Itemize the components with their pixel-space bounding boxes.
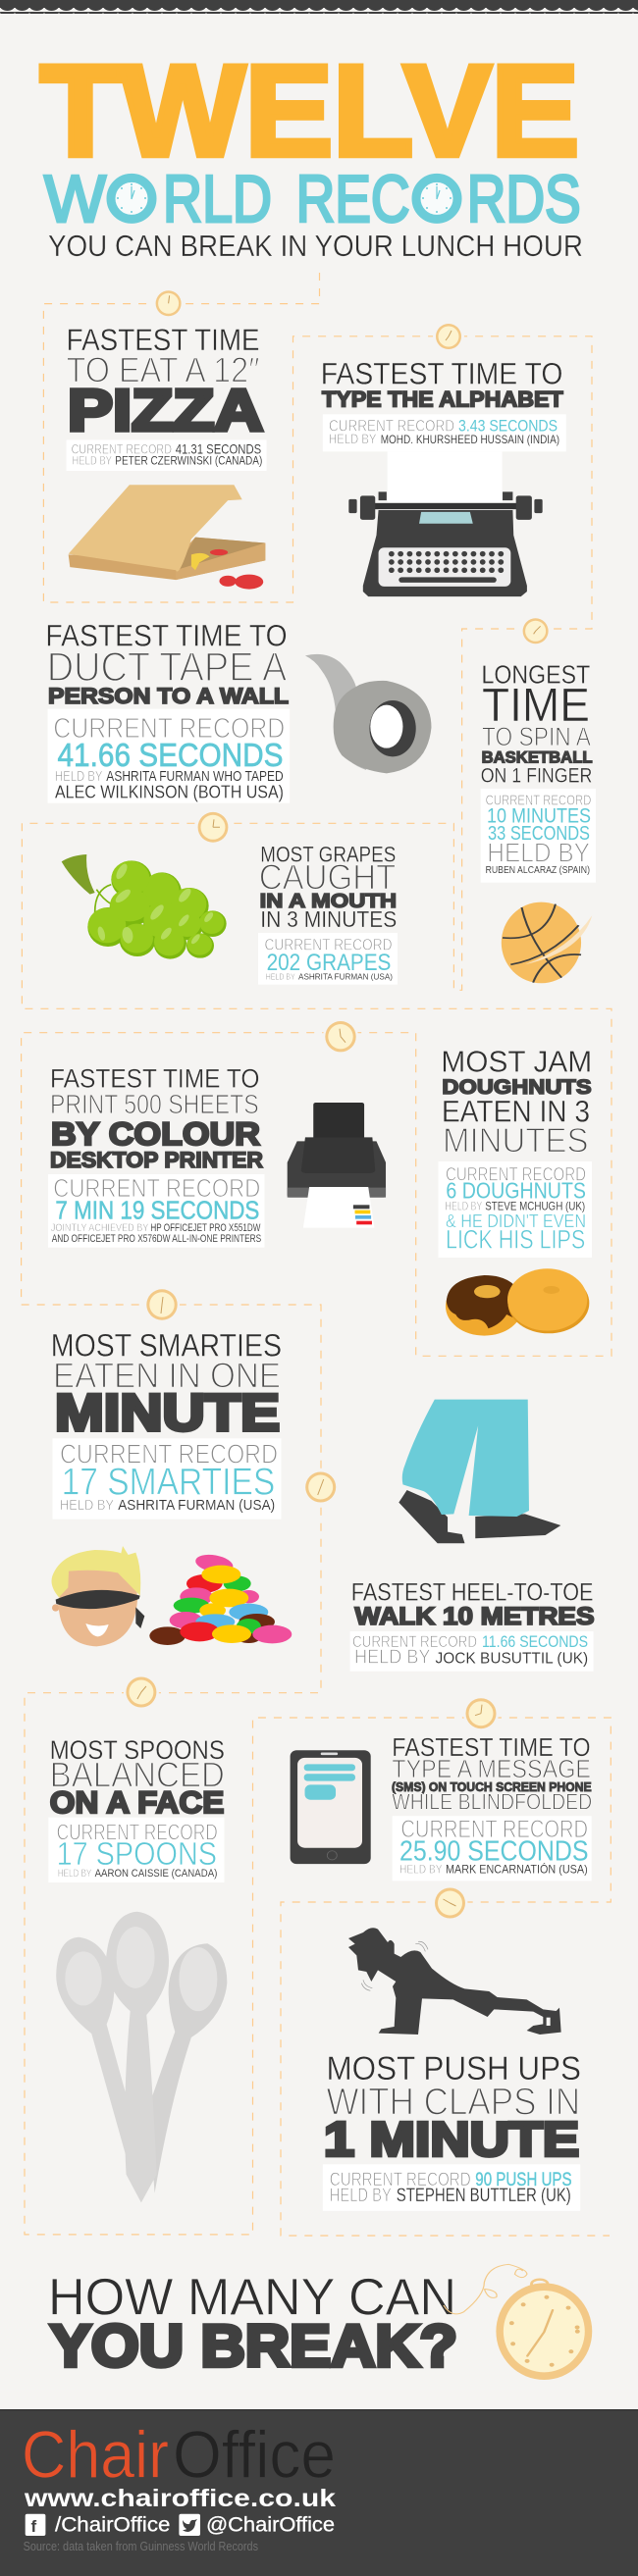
record box: basketball: RUBEN ALCARAZ (SPAIN) bbox=[486, 865, 590, 876]
record box: duct tape: 41.66 SECONDS bbox=[57, 738, 283, 774]
panel: jam doughnuts bbox=[438, 1044, 592, 1336]
source note: Source: data taken from Guinness World Records bbox=[24, 2540, 258, 2553]
record box: smarties: 17 SMARTIES bbox=[62, 1461, 275, 1503]
top scalloped border bbox=[0, 0, 638, 14]
record box: spoons: 17 SPOONS bbox=[57, 1836, 217, 1873]
panel: pizza bbox=[67, 322, 267, 590]
record box: jam doughnuts: 6 DOUGHNUTS bbox=[446, 1178, 586, 1204]
heading: pizza: FASTEST TIME bbox=[67, 322, 260, 357]
record box: pizza: 41.31 SECONDS bbox=[176, 441, 261, 457]
title line: WORLD RECORDS: RDS bbox=[467, 163, 581, 236]
icon: facebook: f bbox=[31, 2517, 37, 2536]
heading: grapes: IN A MOUTH bbox=[260, 891, 397, 912]
heading: pizza: TO EAT A 12″ bbox=[67, 349, 260, 390]
heading: push ups: MOST PUSH UPS bbox=[326, 2050, 581, 2087]
heading: jam doughnuts bbox=[441, 1044, 592, 1159]
heading: spoons: BALANCED bbox=[50, 1754, 225, 1794]
record box: typewriter: 3.43 SECONDS bbox=[458, 417, 558, 436]
clock marker: typewriter bbox=[433, 321, 464, 352]
record box: basketball bbox=[481, 789, 596, 883]
panel: spoons bbox=[48, 1735, 227, 2202]
heading: spoons: ON A FACE bbox=[50, 1784, 224, 1820]
record box: grapes: HELD BY bbox=[266, 971, 295, 981]
clock marker: message bbox=[463, 1696, 499, 1731]
icon: pizza box bbox=[69, 485, 265, 590]
heading: duct tape bbox=[45, 617, 289, 708]
heading: basketball bbox=[481, 662, 593, 787]
record box: jam doughnuts bbox=[438, 1161, 592, 1258]
panel: message bbox=[291, 1732, 592, 1880]
heading: spoons: MOST SPOONS bbox=[50, 1735, 225, 1765]
title line: WORLD RECORDS: REC bbox=[296, 163, 410, 236]
twitter handle: @ChairOffice bbox=[206, 2514, 335, 2537]
heading: how many can you break bbox=[48, 2268, 457, 2379]
title line: WORLD RECORDS bbox=[44, 163, 581, 236]
record box: printer bbox=[48, 1174, 265, 1248]
heading: pizza bbox=[67, 322, 263, 443]
record box: jam doughnuts: HELD BY bbox=[446, 1201, 482, 1213]
clock markers bbox=[124, 287, 552, 1921]
heading: message: WHILE BLINDFOLDED bbox=[392, 1789, 592, 1815]
record box: message: CURRENT RECORD bbox=[400, 1817, 588, 1843]
record box: jam doughnuts: LICK HIS LIPS bbox=[446, 1225, 585, 1255]
icon: push up figure bbox=[348, 1928, 561, 2035]
icon: basketball bbox=[502, 902, 592, 983]
title line: subtitle: YOU CAN BREAK IN YOUR LUNCH HOUR bbox=[48, 230, 583, 263]
record box: typewriter: MOHD. KHURSHEED HUSSAIN (INDIA) bbox=[381, 434, 559, 446]
heading: jam doughnuts: MINUTES bbox=[443, 1121, 589, 1159]
heading: duct tape: PERSON TO A WALL bbox=[48, 684, 289, 708]
record box: basketball: HELD BY bbox=[487, 837, 590, 867]
icon: twitter bbox=[179, 2514, 200, 2536]
record box: typewriter: CURRENT RECORD bbox=[329, 417, 454, 436]
record box: pizza: HELD BY bbox=[72, 456, 112, 468]
record box: push ups: HELD BY bbox=[330, 2186, 392, 2206]
heading: basketball: BASKETBALL bbox=[482, 748, 593, 767]
heading: jam doughnuts: EATEN IN 3 bbox=[442, 1094, 590, 1128]
record box: duct tape: ASHRITA FURMAN WHO TAPED bbox=[106, 769, 284, 785]
clock marker: basketball bbox=[520, 615, 552, 646]
record box: smarties bbox=[53, 1438, 281, 1520]
facebook handle: /ChairOffice bbox=[55, 2514, 170, 2537]
record box: spoons: HELD BY bbox=[58, 1868, 91, 1880]
call to action bbox=[48, 2264, 592, 2380]
heading: message: (SMS) ON TOUCH SCREEN PHONE bbox=[392, 1780, 592, 1794]
heading: typewriter: TYPE THE ALPHABET bbox=[322, 386, 563, 411]
record box: basketball: 33 SECONDS bbox=[488, 823, 590, 845]
panel: smarties bbox=[51, 1328, 292, 1646]
record box: printer: JOINTLY ACHIEVED BY bbox=[51, 1222, 149, 1234]
record box: pizza: CURRENT RECORD bbox=[72, 441, 172, 457]
title line: WORLD RECORDS: W bbox=[44, 163, 106, 236]
record box: grapes bbox=[258, 933, 398, 985]
heading: smarties: MINUTE bbox=[55, 1384, 280, 1442]
record box: pizza: PETER CZERWINSKI (CANADA) bbox=[115, 456, 262, 468]
panel: grapes bbox=[62, 842, 398, 985]
record box: printer: CURRENT RECORD bbox=[53, 1175, 260, 1203]
icon: trousers and shoes bbox=[399, 1400, 560, 1543]
icon: blindfolded face bbox=[51, 1546, 144, 1646]
clock marker: push ups bbox=[432, 1885, 467, 1921]
heading: message bbox=[392, 1732, 592, 1815]
heading: typewriter: FASTEST TIME TO bbox=[321, 355, 562, 390]
record box: duct tape: ALEC WILKINSON (BOTH USA) bbox=[55, 782, 284, 801]
record box: pizza bbox=[67, 439, 267, 471]
heading: duct tape: FASTEST TIME TO bbox=[45, 617, 288, 652]
record box: grapes: ASHRITA FURMAN (USA) bbox=[298, 971, 393, 981]
dashed connector path bbox=[22, 273, 611, 2236]
heading: basketball: ON 1 FINGER bbox=[481, 763, 592, 787]
panel: typewriter bbox=[321, 355, 566, 596]
clock marker: spoons bbox=[124, 1674, 159, 1710]
record box: heel to toe: JOCK BUSUTTIL (UK) bbox=[436, 1651, 588, 1668]
heading: message: TYPE A MESSAGE bbox=[392, 1754, 591, 1783]
logo: ChairOffice: Chair bbox=[22, 2418, 169, 2493]
icon: typewriter bbox=[348, 451, 543, 596]
record box: push ups: CURRENT RECORD bbox=[330, 2169, 471, 2190]
record box: typewriter bbox=[323, 414, 566, 451]
title bbox=[40, 38, 583, 263]
heading: heel to toe: WALK 10 METRES bbox=[355, 1603, 595, 1630]
heading: duct tape: DUCT TAPE A bbox=[47, 644, 287, 690]
clock marker: grapes bbox=[195, 809, 231, 845]
heading: grapes: IN 3 MINUTES bbox=[260, 906, 397, 932]
clock marker: smarties bbox=[144, 1287, 180, 1322]
record box: jam doughnuts: CURRENT RECORD bbox=[446, 1163, 586, 1185]
record box: basketball: CURRENT RECORD bbox=[486, 794, 591, 809]
record box: message bbox=[393, 1816, 592, 1880]
record box: basketball: 10 MINUTES bbox=[487, 804, 591, 827]
heading: smarties: MOST SMARTIES bbox=[51, 1328, 282, 1364]
icon: doughnuts bbox=[446, 1268, 589, 1336]
heading: smarties: EATEN IN ONE bbox=[53, 1356, 281, 1396]
record box: push ups: 90 PUSH UPS bbox=[475, 2169, 572, 2190]
record box: duct tape: CURRENT RECORD bbox=[53, 713, 285, 745]
heading: pizza: PIZZA bbox=[68, 378, 263, 443]
clock marker: pizza bbox=[153, 287, 185, 319]
heading: printer: PRINT 500 SHEETS bbox=[50, 1089, 259, 1119]
record box: grapes: CURRENT RECORD bbox=[265, 935, 393, 953]
record box: printer: AND OFFICEJET PRO X576DW ALL-IN-ONE PRINTERS bbox=[52, 1233, 261, 1245]
record box: spoons bbox=[48, 1818, 224, 1882]
record box: message: HELD BY bbox=[399, 1862, 442, 1876]
record box: heel to toe bbox=[350, 1631, 594, 1672]
icon: duct tape roll bbox=[305, 654, 431, 773]
record box: heel to toe: 11.66 SECONDS bbox=[482, 1633, 588, 1651]
heading: typewriter bbox=[321, 355, 563, 411]
record box: spoons: CURRENT RECORD bbox=[57, 1819, 218, 1844]
icon: phone bbox=[291, 1750, 371, 1864]
heading: smarties bbox=[51, 1328, 282, 1442]
heading: grapes bbox=[259, 842, 397, 932]
heading: jam doughnuts: MOST JAM bbox=[441, 1044, 592, 1078]
heading: printer: DESKTOP PRINTER bbox=[50, 1148, 263, 1172]
icon: printer bbox=[288, 1103, 386, 1228]
heading: basketball: LONGEST bbox=[481, 662, 590, 690]
heading: how many can you break: YOU BREAK? bbox=[50, 2313, 457, 2379]
record box: smarties: HELD BY bbox=[60, 1497, 114, 1514]
heading: spoons bbox=[50, 1735, 225, 1820]
record box: message: MARK ENCARNATIÓN (USA) bbox=[446, 1861, 588, 1876]
icon: facebook bbox=[26, 2514, 45, 2536]
title line: WORLD RECORDS: RLD bbox=[163, 163, 272, 236]
record box: printer: HP OFFICEJET PRO X551DW bbox=[150, 1222, 261, 1234]
record box: push ups: STEPHEN BUTTLER (UK) bbox=[397, 2186, 571, 2206]
record box: typewriter: HELD BY bbox=[329, 431, 377, 446]
record box: heel to toe: HELD BY bbox=[354, 1647, 431, 1669]
panel: basketball bbox=[481, 662, 596, 983]
clock marker: heel to toe bbox=[303, 1469, 339, 1505]
heading: heel to toe bbox=[351, 1579, 595, 1630]
record box: duct tape bbox=[47, 709, 290, 803]
footer bbox=[0, 2409, 638, 2576]
record box: jam doughnuts: & HE DIDN'T EVEN bbox=[446, 1211, 586, 1231]
heading: push ups: 1 MINUTE bbox=[324, 2114, 579, 2167]
logo: ChairOffice bbox=[22, 2418, 336, 2493]
heading: printer: BY COLOUR bbox=[51, 1115, 260, 1152]
record box: heel to toe: CURRENT RECORD bbox=[352, 1633, 477, 1651]
record box: message: 25.90 SECONDS bbox=[399, 1834, 589, 1866]
record box: printer: 7 MIN 19 SECONDS bbox=[55, 1196, 259, 1225]
heading: basketball: TIME bbox=[482, 680, 590, 732]
panel: duct tape bbox=[45, 617, 431, 803]
heading: grapes: MOST GRAPES bbox=[260, 842, 396, 866]
heading: grapes: CAUGHT bbox=[259, 857, 396, 898]
heading: printer bbox=[50, 1063, 263, 1172]
icon: pocket watch bbox=[444, 2264, 592, 2380]
icon: spoons bbox=[56, 1912, 227, 2202]
panel: push ups bbox=[323, 1928, 581, 2211]
clock marker: printer bbox=[323, 1019, 358, 1055]
panel: printer bbox=[48, 1063, 386, 1248]
heading: push ups bbox=[324, 2050, 581, 2167]
record box: smarties: CURRENT RECORD bbox=[60, 1439, 278, 1469]
logo: ChairOffice: Office bbox=[173, 2418, 336, 2493]
icon: smarties pile bbox=[149, 1552, 292, 1645]
heading: basketball: TO SPIN A bbox=[482, 722, 591, 751]
record box: spoons: AARON CAISSIE (CANADA) bbox=[95, 1868, 217, 1880]
record box: jam doughnuts: STEVE MCHUGH (UK) bbox=[485, 1201, 585, 1213]
heading: printer: FASTEST TIME TO bbox=[50, 1063, 259, 1093]
heading: message: FASTEST TIME TO bbox=[392, 1732, 591, 1762]
heading: heel to toe: FASTEST HEEL-TO-TOE bbox=[351, 1579, 593, 1607]
panel: heel to toe bbox=[350, 1400, 595, 1672]
record box: grapes: 202 GRAPES bbox=[267, 950, 391, 976]
heading: push ups: WITH CLAPS IN bbox=[326, 2081, 580, 2123]
icon: grapes bbox=[62, 854, 227, 959]
record box: duct tape: HELD BY bbox=[55, 769, 103, 785]
heading: how many can you break: HOW MANY CAN bbox=[48, 2268, 456, 2326]
title line: TWELVE: TWELVE bbox=[40, 38, 579, 182]
record box: push ups bbox=[323, 2164, 580, 2211]
heading: jam doughnuts: DOUGHNUTS bbox=[442, 1076, 592, 1099]
website: www.chairoffice.co.uk bbox=[24, 2485, 336, 2512]
record box: smarties: ASHRITA FURMAN (USA) bbox=[118, 1497, 275, 1514]
